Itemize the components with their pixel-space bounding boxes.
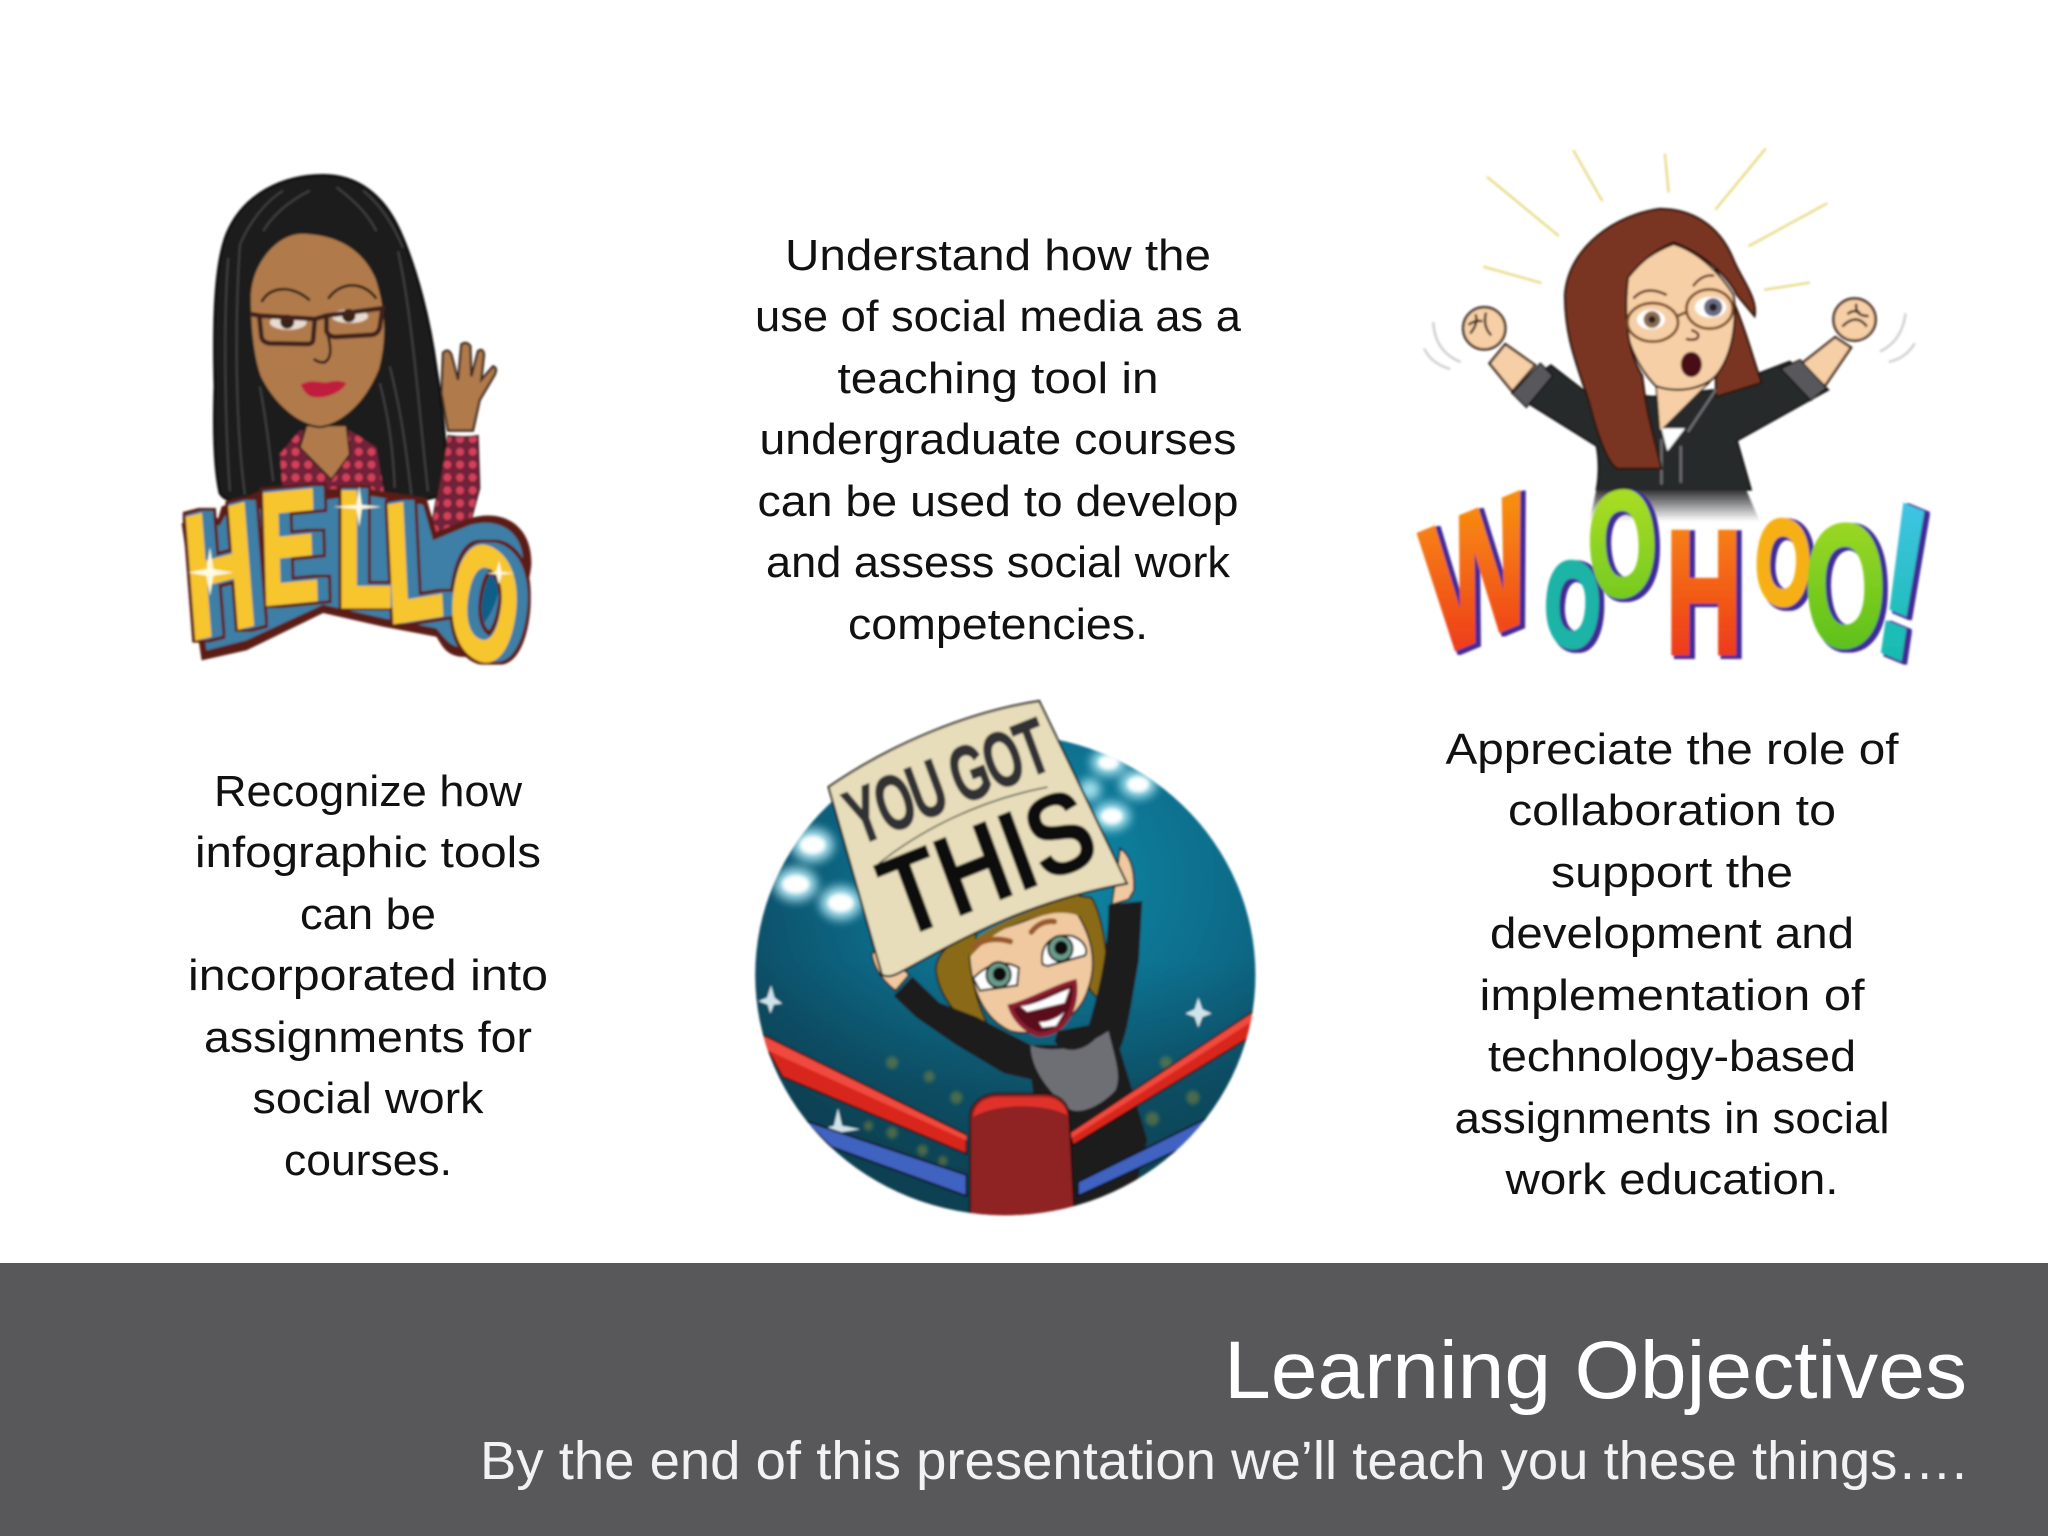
- text block: objective 3 (collaboration): collaboration to: [1508, 786, 1836, 835]
- illustration: You Got This character in a ring: [740, 701, 1267, 1221]
- word: WOOHOO!: W: [1413, 455, 1543, 694]
- face: [1625, 244, 1735, 390]
- rope highlights: [759, 1011, 1256, 1141]
- text block: objective 1 (infographic tools): Recognize how: [214, 767, 522, 816]
- text block: objective 1 (infographic tools): infographic tools: [195, 828, 541, 877]
- hair strands: [225, 187, 428, 495]
- crowd shade: [758, 981, 1252, 1213]
- red ropes: [759, 1010, 1257, 1154]
- text block: objective 1 (infographic tools): assignments for: [204, 1013, 532, 1062]
- spotlight halos: [774, 749, 1156, 920]
- letter backing inner: [192, 495, 523, 650]
- text block: objective 3 (collaboration): [1446, 725, 1899, 1204]
- left arm: [894, 977, 1034, 1080]
- hair front: [1565, 209, 1755, 469]
- eyes: [1637, 297, 1726, 329]
- crowd bokeh: [864, 1044, 1215, 1166]
- text block: objective 3 (collaboration): assignments in social: [1454, 1094, 1890, 1143]
- glasses: [1627, 289, 1733, 342]
- text block: objective 2 (social media): Understand how the: [785, 231, 1211, 280]
- title: Learning Objectives: [1224, 1325, 1967, 1416]
- shirt: [1661, 428, 1685, 451]
- arena backdrop: [755, 734, 1255, 1215]
- right arm: [1085, 901, 1142, 1052]
- neck: [300, 425, 350, 480]
- brows, nose and freckles: [262, 285, 376, 362]
- mouth: [1010, 982, 1075, 1035]
- letter backing: [182, 488, 531, 660]
- body: [1027, 1045, 1147, 1217]
- brows: [973, 921, 1054, 947]
- sign text: THIS: [863, 761, 1112, 964]
- sparkles: [188, 486, 515, 596]
- shirt: [280, 431, 390, 529]
- text block: objective 3 (collaboration): support the: [1551, 848, 1793, 897]
- word: HELLO: O: [437, 501, 532, 708]
- brows and nose: [1633, 275, 1714, 340]
- face: [970, 905, 1093, 1033]
- illustration: Hello waving character: [178, 175, 532, 708]
- sign divider: [874, 787, 1048, 868]
- forearms: [1490, 337, 1851, 391]
- text block: objective 2 (social media): use of social media as a: [755, 292, 1242, 341]
- text block: objective 1 (infographic tools): incorporated into: [188, 951, 548, 1000]
- subtitle: By the end of this presentation we’ll teach you these things….: [480, 1431, 1967, 1491]
- word: HELLO: L: [381, 461, 447, 659]
- text block: objective 2 (social media): competencies.: [848, 600, 1148, 649]
- text block: objective 1 (infographic tools): courses.: [284, 1136, 452, 1185]
- word: HELLO: E: [257, 457, 321, 639]
- jacket: [1512, 362, 1828, 490]
- motion arcs: [1425, 314, 1914, 369]
- lips: [301, 381, 346, 397]
- word: WOOHOO!: O: [1751, 491, 1815, 634]
- sign text: YOU GOT: [834, 702, 1061, 861]
- text block: objective 2 (social media): undergraduate courses: [760, 415, 1236, 464]
- word: WOOHOO!: O: [1801, 487, 1889, 687]
- text block: objective 3 (collaboration): technology-based: [1488, 1032, 1856, 1081]
- jacket fade: [1590, 489, 1760, 521]
- sign board: [829, 701, 1127, 976]
- sleeve cuffs: [1512, 360, 1826, 407]
- text block: objective 3 (collaboration): implementation of: [1480, 971, 1865, 1020]
- eyes: [270, 309, 368, 330]
- blue ropes: [804, 1115, 1227, 1196]
- sparkles: [759, 985, 1212, 1143]
- O counter: [456, 539, 510, 633]
- word: WOOHOO!: O: [1541, 533, 1604, 676]
- text block: objective 3 (collaboration): work education.: [1504, 1155, 1838, 1204]
- illustration: Woohoo cheering character: [1413, 149, 1941, 709]
- text block: objective 1 (infographic tools): [188, 767, 548, 1185]
- footer band: [0, 1263, 2048, 1536]
- text block: objective 3 (collaboration): development and: [1490, 909, 1854, 958]
- right hair strand: [1077, 894, 1108, 999]
- word: WOOHOO!: [1413, 455, 1941, 709]
- word: HELLO: H: [178, 467, 262, 678]
- hands: [872, 848, 1134, 991]
- waving hand: [441, 343, 496, 431]
- word: HELLO: L: [336, 458, 392, 642]
- face: [250, 233, 385, 427]
- word: HELLO: [178, 457, 532, 708]
- zip and drawstrings: [1661, 390, 1716, 485]
- text block: objective 2 (social media): teaching tool in: [838, 354, 1158, 403]
- word: WOOHOO!: !: [1864, 457, 1941, 709]
- neck: [1656, 383, 1709, 432]
- word: WOOHOO!: H: [1666, 494, 1742, 691]
- ring post: [970, 1093, 1075, 1217]
- hair: [214, 175, 446, 502]
- eyes: [973, 936, 1086, 991]
- spotlight cores: [782, 755, 1149, 912]
- word: WOOHOO!: O: [1583, 456, 1662, 632]
- glasses: [250, 308, 382, 344]
- text block: objective 2 (social media): [755, 231, 1242, 649]
- hair back: [1716, 270, 1762, 397]
- excitement rays: [1484, 149, 1826, 290]
- fists: [1463, 298, 1876, 349]
- text block: objective 1 (infographic tools): can be: [300, 890, 436, 939]
- text block: objective 2 (social media): can be used to develop: [758, 477, 1238, 526]
- mouth: [1681, 352, 1702, 377]
- left hair strand: [934, 932, 988, 1024]
- text block: objective 1 (infographic tools): social work: [252, 1074, 485, 1123]
- sleeve: [430, 436, 480, 535]
- fringe: [968, 894, 1080, 957]
- text block: objective 2 (social media): and assess social work: [766, 538, 1231, 587]
- text block: objective 3 (collaboration): Appreciate the role of: [1446, 725, 1899, 774]
- scarf: [1031, 1031, 1118, 1111]
